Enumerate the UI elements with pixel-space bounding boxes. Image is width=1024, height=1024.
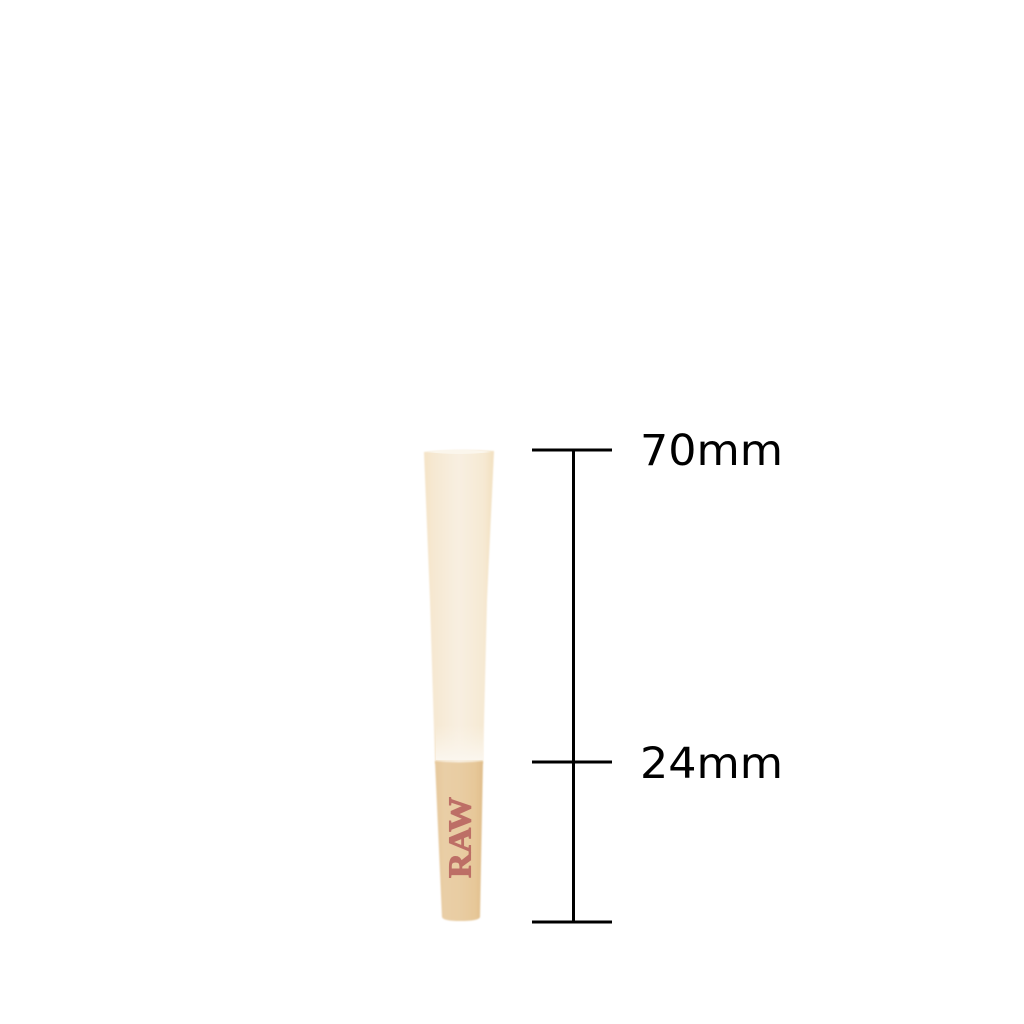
cone top opening bbox=[427, 450, 491, 454]
vertical measure line bbox=[572, 449, 575, 923]
RAW logo: RAW bbox=[442, 797, 478, 878]
label: 70mm: 70mm bbox=[640, 426, 783, 476]
measurement scale bbox=[532, 448, 612, 924]
cone fade above tip bbox=[436, 725, 484, 760]
top tick bbox=[532, 448, 612, 452]
label: 24mm: 24mm bbox=[640, 739, 783, 789]
cone illustration bbox=[424, 450, 494, 921]
cone filter tip bbox=[435, 761, 483, 921]
cone paper body bbox=[424, 450, 494, 764]
middle tick bbox=[532, 760, 612, 764]
bottom tick bbox=[532, 920, 612, 924]
